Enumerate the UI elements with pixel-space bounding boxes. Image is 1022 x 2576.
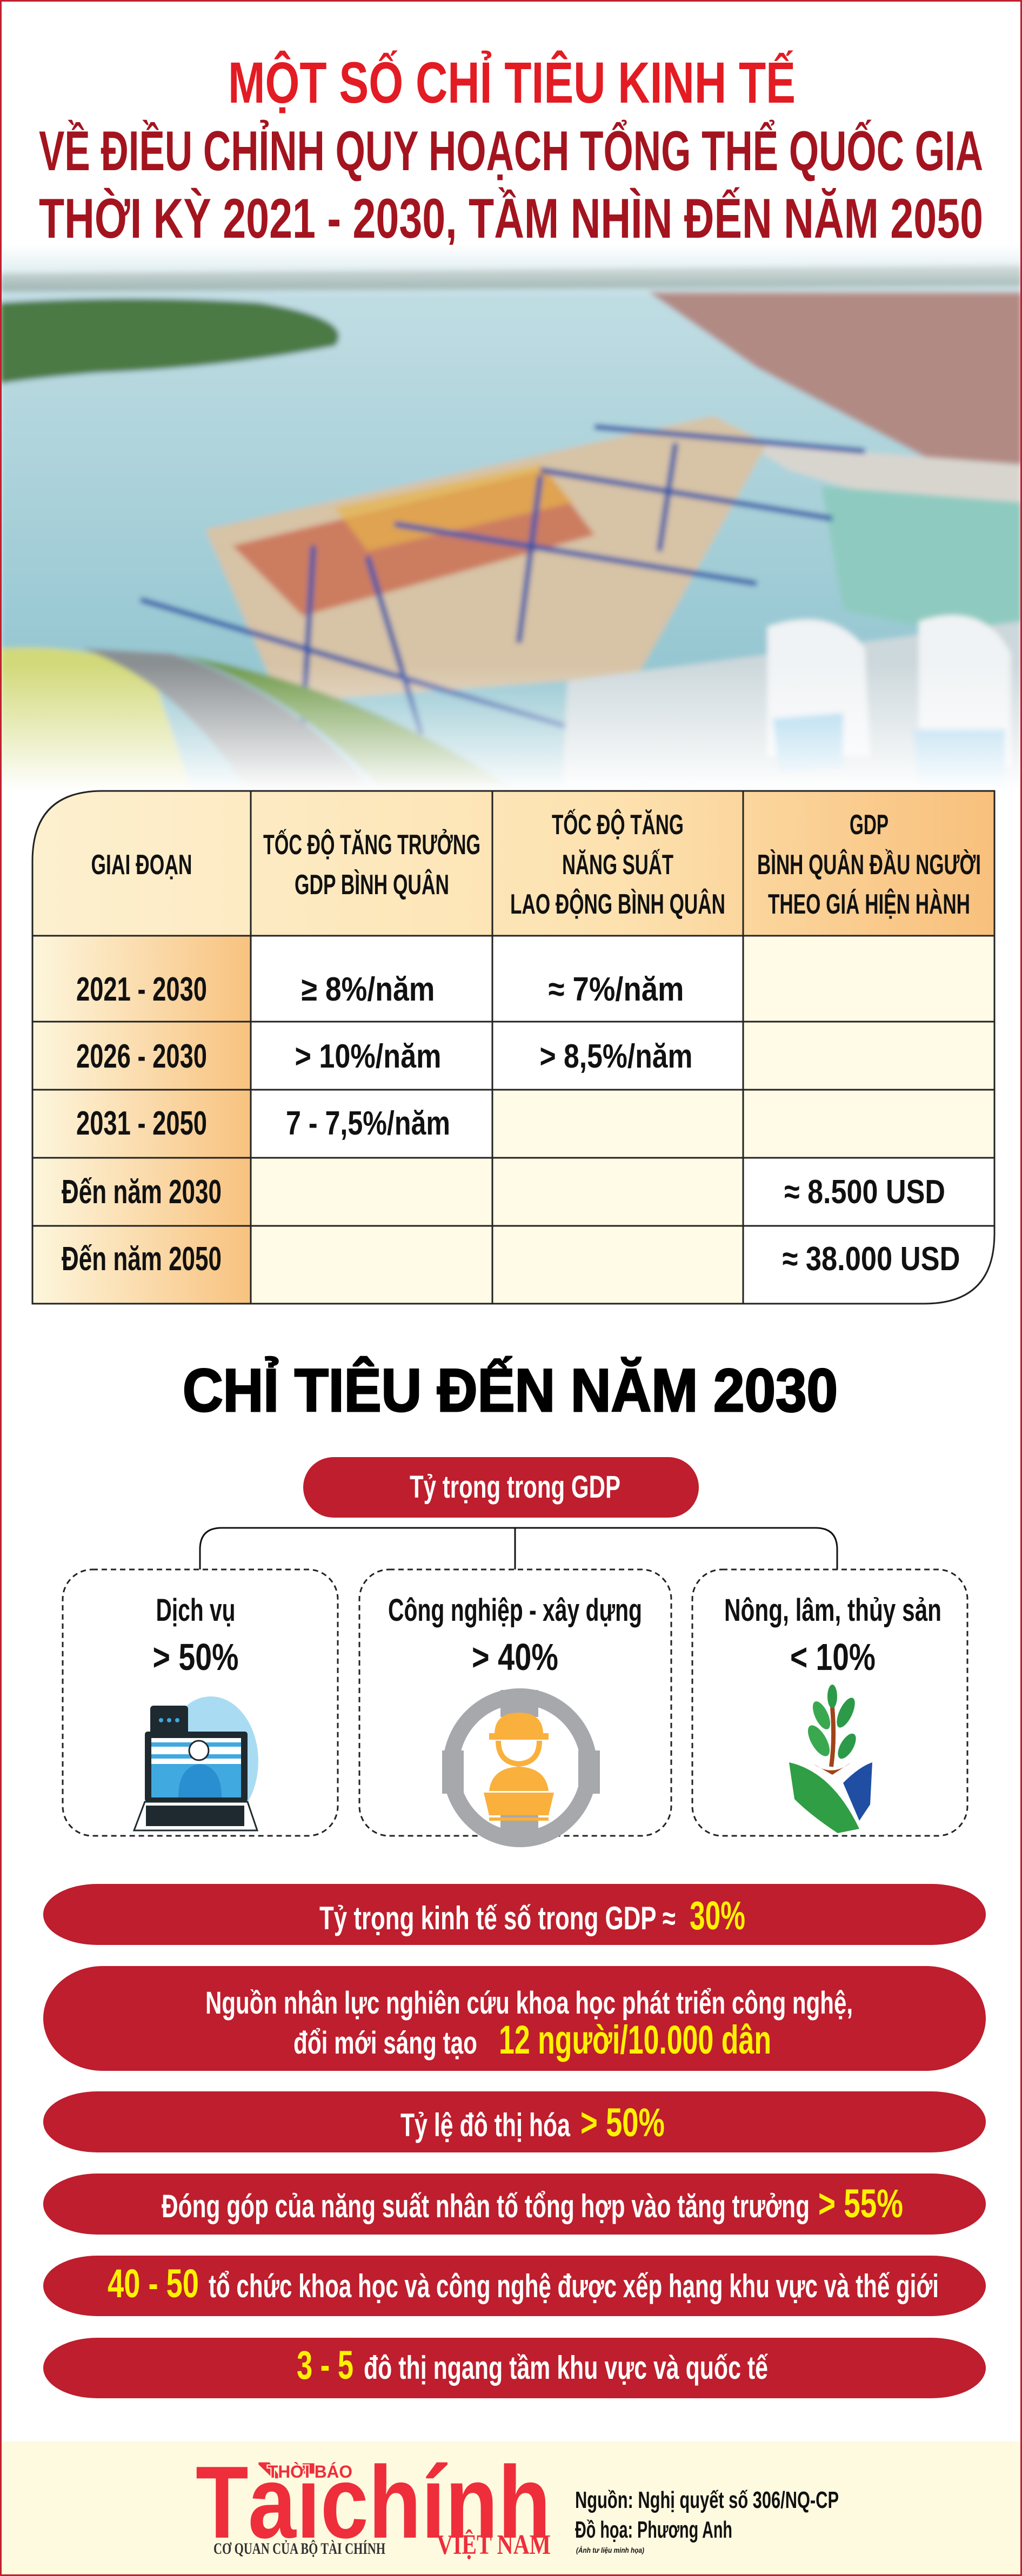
table rows: 7 - 7,5%/năm [286, 1105, 450, 1142]
table header: GDP BÌNH QUÂN [295, 869, 449, 901]
table header: TỐC ĐỘ TĂNG TRƯỞNG [263, 829, 480, 861]
table rows: Đến năm 2050 [62, 1240, 222, 1278]
icon: laptop support [134, 1696, 258, 1830]
pill: TFP contribution: > 55% [818, 2181, 903, 2226]
pill: urbanization: > 50% [580, 2100, 665, 2145]
title [39, 50, 983, 250]
table rows: > 8,5%/năm [539, 1038, 693, 1075]
pill: digital economy [43, 1884, 986, 1945]
pill: cities [43, 2338, 986, 2398]
table rows: Đến năm 2030 [62, 1173, 222, 1211]
pill: cities: 3 - 5 [297, 2343, 353, 2387]
table header: NĂNG SUẤT [562, 849, 673, 881]
panel: agriculture: Nông, lâm, thủy sản [724, 1593, 941, 1628]
source credits: (Ảnh tư liệu minh họa) [576, 2546, 644, 2554]
title: MỘT SỐ CHỈ TIÊU KINH TẾ [228, 50, 796, 115]
table rows: 2026 - 2030 [76, 1038, 207, 1075]
pill: urbanization [43, 2091, 986, 2152]
section heading: CHỈ TIÊU ĐẾN NĂM 2030 [183, 1357, 838, 1424]
table rows: 2021 - 2030 [76, 971, 207, 1008]
footer [2, 2441, 1020, 2574]
pill: digital economy: 30% [690, 1893, 745, 1938]
icon: gear with worker [442, 1690, 600, 1839]
pill: digital economy: Tỷ trọng kinh tế số trong GDP ≈ [319, 1900, 676, 1936]
pill: R&D workforce: đổi mới sáng tạo [293, 2025, 477, 2061]
table header: GDP [850, 809, 889, 841]
logo: THỜI BÁO [268, 2462, 352, 2481]
source credits: Nguồn: Nghị quyết số 306/NQ-CP [575, 2487, 839, 2513]
table header: GIAI ĐOẠN [91, 849, 192, 881]
pill: GDP share [303, 1457, 699, 1518]
panel: services [63, 1569, 338, 1836]
table rows [62, 971, 960, 1278]
panel: industry [359, 1569, 671, 1839]
logo: Tàichính [196, 2445, 551, 2560]
table header: LAO ĐỘNG BÌNH QUÂN [510, 888, 725, 920]
table rows: ≈ 38.000 USD [783, 1240, 960, 1278]
table header: TỐC ĐỘ TĂNG [552, 809, 684, 841]
table rows: 2031 - 2050 [76, 1105, 207, 1142]
table header [91, 809, 981, 920]
panel: industry: > 40% [472, 1636, 558, 1678]
icon: tree and field [789, 1685, 872, 1833]
source credits [575, 2487, 839, 2554]
source credits: Đồ họa: Phương Anh [575, 2517, 732, 2543]
table rows: ≈ 7%/năm [548, 971, 684, 1008]
connector lines [200, 1528, 837, 1569]
panel: agriculture: < 10% [790, 1636, 876, 1678]
logo: CƠ QUAN CỦA BỘ TÀI CHÍNH [213, 2540, 385, 2558]
logo: VIỆT NAM [437, 2529, 551, 2560]
pill: R&D workforce [43, 1966, 986, 2071]
pill: science organizations: 40 - 50 [108, 2261, 199, 2306]
pill: R&D workforce: 12 người/10.000 dân [499, 2017, 771, 2062]
pill: TFP contribution [43, 2174, 986, 2235]
panel: industry: Công nghiệp - xây dựng [388, 1593, 642, 1628]
pill: urbanization: Tỷ lệ đô thị hóa [400, 2107, 570, 2143]
panel: agriculture [692, 1569, 967, 1836]
table [32, 791, 994, 1304]
photo: port, highway, workers [0, 238, 1022, 800]
pill: science organizations [43, 2256, 986, 2316]
panel: services: > 50% [152, 1636, 239, 1678]
table rows: > 10%/năm [295, 1038, 441, 1075]
panel: services: Dịch vụ [156, 1593, 236, 1628]
table rows: ≈ 8.500 USD [784, 1173, 945, 1211]
pill: cities: đô thị ngang tầm khu vực và quốc tế [364, 2350, 768, 2386]
table rows: ≥ 8%/năm [302, 971, 435, 1008]
pill: GDP share: Tỷ trọng trong GDP [410, 1470, 620, 1505]
